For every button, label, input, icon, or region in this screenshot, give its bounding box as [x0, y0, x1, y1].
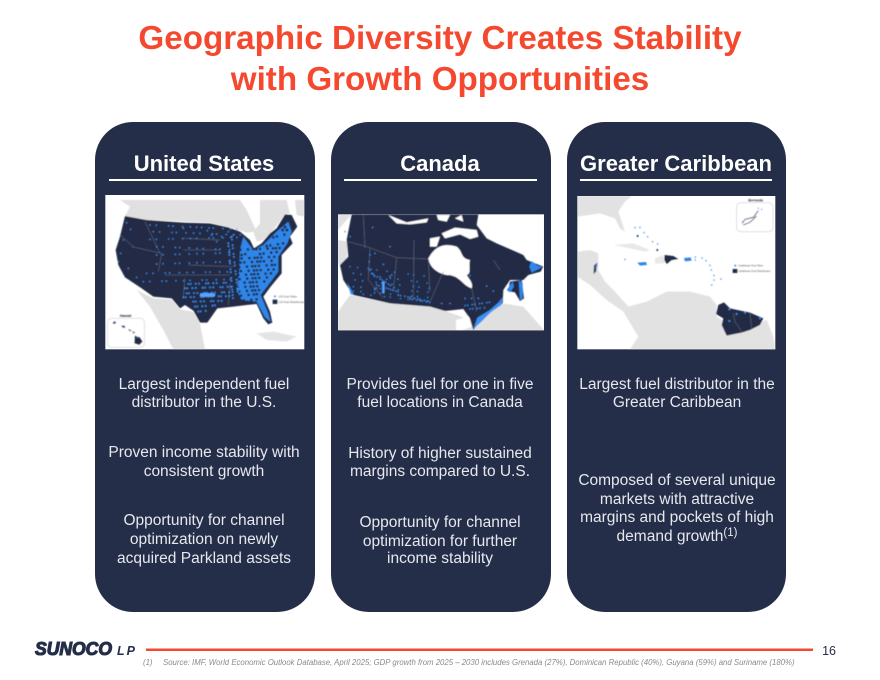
title: Geographic Diversity Creates Stability [138, 20, 742, 57]
text block: Caribbean points: (1) [723, 527, 738, 539]
text block: US points: Opportunity for channel [123, 512, 285, 529]
text block: Canada points: income stability [387, 550, 493, 567]
title: with Growth Opportunities [230, 61, 649, 98]
text block: Caribbean points: Composed of several unique [578, 472, 776, 489]
text block: Caribbean points: margins and pockets of high [580, 509, 774, 526]
map: Caribbean [577, 196, 775, 349]
text block: US points: Proven income stability with [108, 444, 300, 461]
logo: Sunoco LP: LP [117, 644, 137, 658]
text block: US points: Largest independent fuel [119, 376, 289, 393]
text block: US points: consistent growth [144, 463, 264, 480]
text block: Caribbean points: Largest fuel distributor in the [579, 376, 775, 393]
map: United States [105, 195, 306, 349]
text block: US points [108, 376, 300, 567]
text block: Canada points: margins compared to U.S. [350, 463, 530, 480]
text block: Canada points: optimization for further [363, 533, 517, 550]
panel: United States [95, 122, 315, 612]
map: Caribbean: Caribbean Fuel Distribution [738, 269, 771, 273]
map: Caribbean: Bermuda [748, 199, 763, 203]
text block: Canada points: Provides fuel for one in five [347, 376, 533, 393]
heading: Canada: Canada [400, 151, 480, 176]
footnote: (1) [143, 658, 153, 667]
text block: US points: acquired Parkland assets [117, 550, 291, 567]
text block: Caribbean points: markets with attractive [600, 491, 754, 508]
title [138, 20, 742, 98]
map: Canada [338, 214, 544, 330]
map: United States: US Fuel Distribution [279, 300, 306, 304]
text block: Canada points: Opportunity for channel [359, 514, 521, 531]
map: Caribbean: Caribbean Fuel Sites [738, 264, 764, 268]
page number: 16 [822, 644, 836, 658]
text block: Canada points: History of higher sustained [348, 445, 532, 462]
map: United States: Hawaii [120, 314, 131, 318]
text block: US points: distributor in the U.S. [132, 394, 276, 411]
text block: Caribbean points [578, 376, 776, 545]
text block: Canada points [347, 376, 533, 567]
heading: Greater Caribbean: Greater Caribbean [580, 151, 772, 176]
text block: Caribbean points: demand growth [617, 528, 723, 545]
heading: United States: United States [134, 151, 274, 176]
panel: Canada [331, 122, 551, 612]
footnote: Source: IMF, World Economic Outlook Database, April 2025; GDP growth from 2025 – 2030 includes Grenada (27%), Dominican Republic (40%), Guyana (59%) and Suriname (180%) [163, 658, 795, 667]
panel: Greater Caribbean [567, 122, 786, 612]
text block: US points: optimization on newly [130, 531, 278, 548]
text block: Canada points: fuel locations in Canada [357, 394, 523, 411]
map: United States: US Fuel Sites [279, 294, 297, 298]
logo: Sunoco LP: SUNOCO [35, 639, 112, 659]
text block: Caribbean points: Greater Caribbean [613, 394, 741, 411]
footer rule [146, 648, 813, 651]
